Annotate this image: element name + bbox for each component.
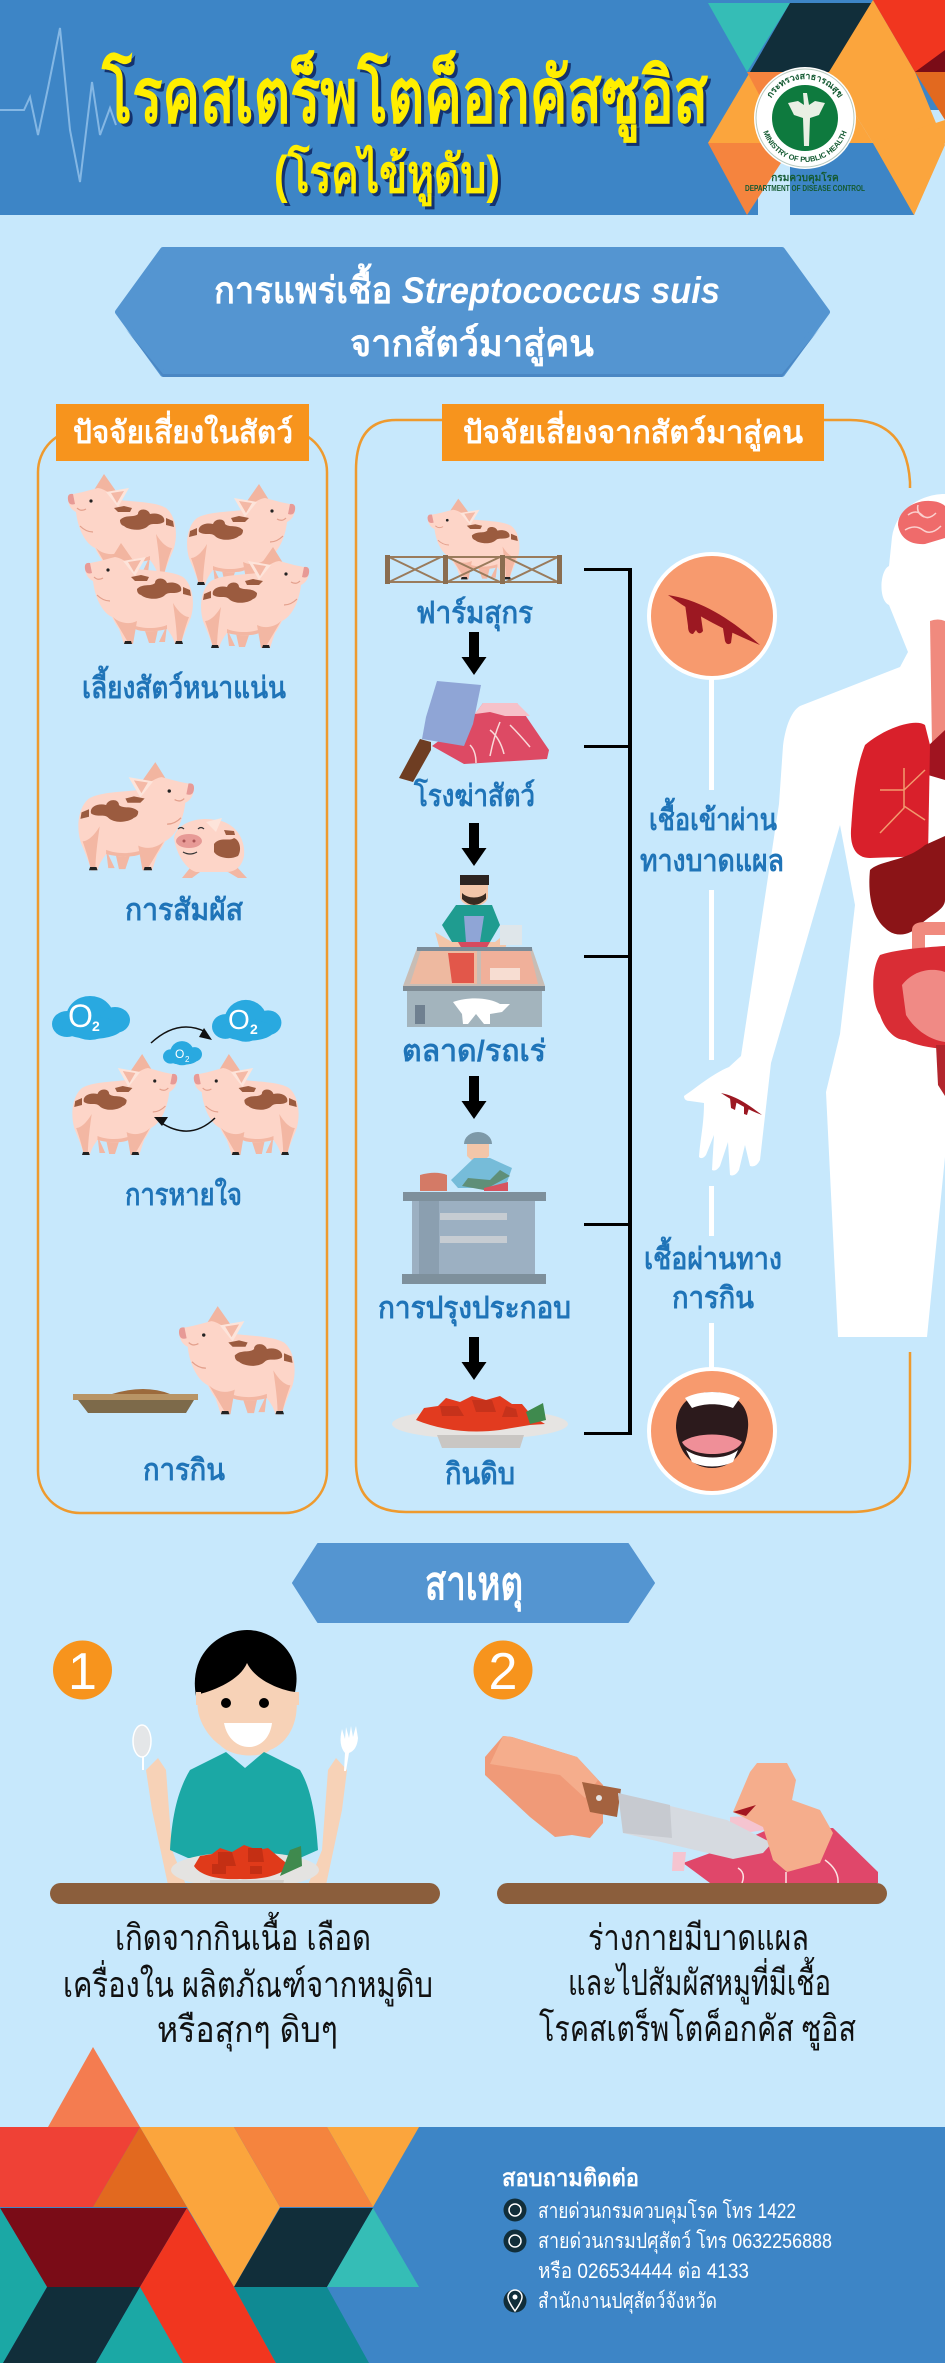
contact row: disease control hotline <box>504 2198 796 2224</box>
label: contact: การสัมผัส <box>125 894 244 927</box>
label: through wound: ทางบาดแผล <box>640 845 784 878</box>
logo: กรมควบคุมโรค <box>771 171 839 184</box>
label: through eating: เชื้อผ่านทาง <box>644 1236 782 1276</box>
arrow <box>462 823 486 866</box>
label: through wound <box>640 797 784 878</box>
table 1 <box>50 1883 440 1904</box>
label: slaughterhouse: โรงฆ่าสัตว์ <box>413 777 535 813</box>
label: dense farming: เลี้ยงสัตว์หนาแน่น <box>82 665 286 705</box>
icon: pig farm <box>385 499 562 584</box>
human body silhouette <box>684 494 945 1337</box>
logo: MINISTRY OF PUBLIC HEALTH <box>763 130 847 162</box>
contact row: provincial office <box>504 2289 717 2314</box>
contact row: livestock hotline: หรือ 026534444 ต่อ 4133 <box>538 2260 749 2283</box>
table 2 <box>497 1883 887 1904</box>
contact row: livestock hotline <box>504 2229 832 2283</box>
spoon and fork <box>133 1725 358 1771</box>
contact row: disease control hotline: สายด่วนกรมควบคุมโรค โทร 1422 <box>538 2199 796 2224</box>
badge: number 2: 2 <box>489 1643 517 1701</box>
logo: DEPARTMENT OF DISEASE CONTROL <box>745 184 865 193</box>
panel: animal-to-human risk factors <box>356 404 910 1512</box>
text: cause 2: และไปสัมผัสหมูที่มีเชื้อ <box>568 1956 831 2005</box>
header band <box>0 0 945 215</box>
icon: wound circle <box>649 554 775 678</box>
icon: raw meat plate <box>392 1396 568 1448</box>
icon: breathing pigs and oxygen: 2 <box>250 1021 258 1037</box>
arrow <box>462 1076 486 1119</box>
text: cause 2: โรคสเตร็พโตค็อกคัส ซูอิส <box>539 2006 856 2051</box>
footer band <box>0 2047 945 2363</box>
icon: eating pig with tray <box>73 1306 295 1414</box>
white route line <box>709 675 714 1373</box>
illustration: boy eating <box>133 1630 358 1892</box>
contact heading: สอบถามติดต่อ <box>502 2165 639 2192</box>
banner: transmission heading <box>118 250 827 377</box>
badge: number 1: 1 <box>68 1643 97 1701</box>
label: breathing: การหายใจ <box>125 1177 242 1212</box>
icon: mouth circle <box>649 1369 775 1493</box>
text: cause 1: เครื่องใน ผลิตภัณฑ์จากหมูดิบ <box>63 1960 433 2007</box>
label: market: ตลาด/รถเร่ <box>402 1035 546 1068</box>
label: eat raw: กินดิบ <box>445 1458 515 1491</box>
icon: hand wound <box>721 1093 762 1115</box>
icon: breathing pigs and oxygen: O <box>175 1047 184 1061</box>
banner: causes heading <box>293 1544 654 1622</box>
bracket connector <box>584 568 632 1435</box>
illustration: hand cutting meat <box>485 1736 878 1883</box>
label: through eating: การกิน <box>672 1282 754 1315</box>
label: pig farm: ฟาร์มสุกร <box>416 596 533 632</box>
icon: butcher and meat display <box>403 875 545 1027</box>
label: eating: การกิน <box>143 1454 225 1487</box>
panel heading: ปัจจัยเสี่ยงในสัตว์ <box>73 410 293 450</box>
icon: dense pigs <box>68 474 309 648</box>
label: through wound: เชื้อเข้าผ่าน <box>649 797 777 837</box>
panel: animal risk factors <box>38 404 327 1513</box>
icon: breathing pigs and oxygen: 2 <box>92 1018 100 1034</box>
title: โรคสเตร็พโตค็อกคัสซูอิส <box>101 50 708 143</box>
header geometric triangles <box>708 0 945 215</box>
logo <box>745 67 865 193</box>
banner: transmission heading: การแพร่เชื้อ Streptococcus suis <box>214 263 720 311</box>
icon: contact pigs <box>78 762 247 878</box>
icon: slaughterhouse cleaver and meat <box>399 681 549 782</box>
text: cause 2 <box>539 1917 856 2051</box>
label: through eating <box>644 1236 782 1315</box>
heartbeat line <box>0 28 116 182</box>
panel heading: ปัจจัยเสี่ยงจากสัตว์มาสู่คน <box>463 410 803 452</box>
label: cooking: การปรุงประกอบ <box>378 1292 571 1327</box>
icon: breathing pigs and oxygen: 2 <box>185 1055 190 1064</box>
badge: number 1 <box>53 1640 112 1701</box>
icon: breathing pigs and oxygen: O <box>68 998 93 1034</box>
panel heading <box>56 404 309 461</box>
badge: number 2 <box>474 1640 532 1701</box>
title <box>101 50 708 207</box>
icon: organs <box>851 501 945 1096</box>
text: cause 2: ร่างกายมีบาดแผล <box>588 1917 809 1958</box>
logo: กระทรวงสาธารณสุข <box>768 73 843 98</box>
arrow <box>462 632 486 675</box>
icon: breathing pigs and oxygen <box>52 996 299 1155</box>
footer geometric pattern <box>0 2047 419 2363</box>
contact row: livestock hotline: สายด่วนกรมปศุสัตว์ โทร 0632256888 <box>538 2229 832 2254</box>
banner: causes heading: สาเหตุ <box>425 1557 523 1612</box>
icon: breathing pigs and oxygen: O <box>228 1004 250 1035</box>
arrow <box>462 1337 486 1380</box>
icon: cook at table <box>402 1132 546 1284</box>
contact row: provincial office: สำนักงานปศุสัตว์จังหวัด <box>538 2289 717 2314</box>
text: cause 1: เกิดจากกินเนื้อ เลือด <box>115 1911 371 1958</box>
text: cause 1 <box>63 1911 433 2052</box>
text: cause 1: หรือสุกๆ ดิบๆ <box>157 2009 338 2052</box>
panel heading <box>442 404 824 461</box>
title: (โรคไข้หูดับ) <box>274 143 500 207</box>
banner: transmission heading: จากสัตว์มาสู่คน <box>350 323 594 367</box>
